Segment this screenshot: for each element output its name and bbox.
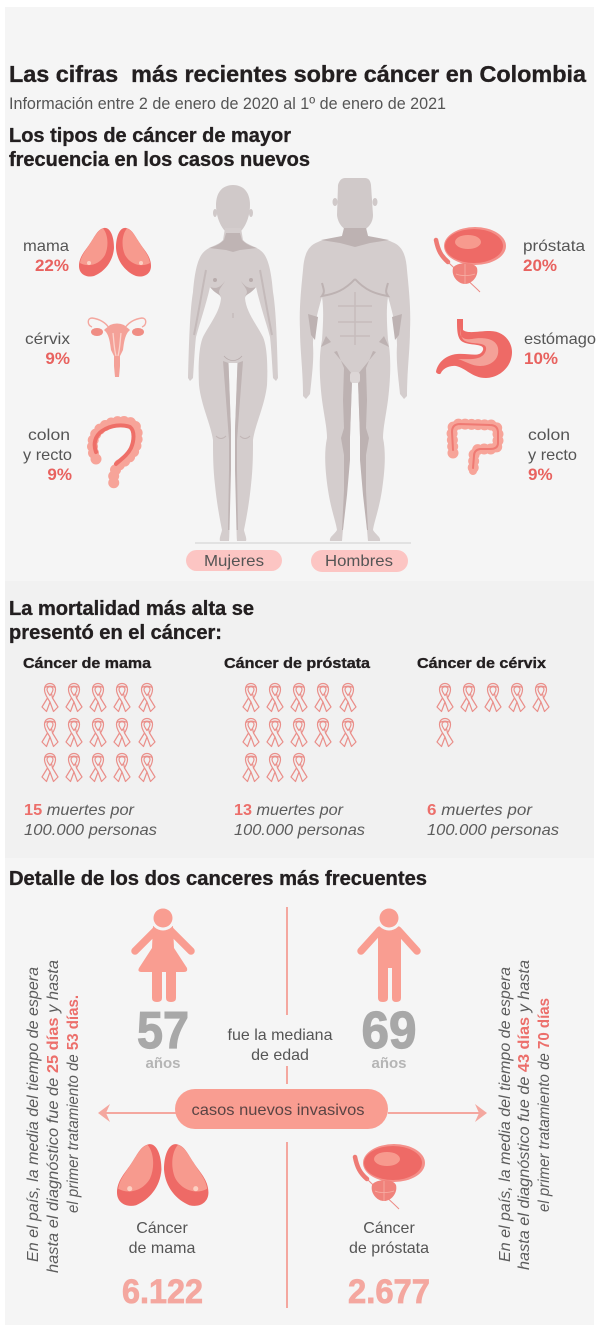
ribbons: 15	[42, 684, 155, 782]
heading: detail: Detalle de los dos canceres más frecuentes	[9, 868, 427, 890]
label: prostate cancer: Cáncer	[363, 1220, 415, 1237]
subtitle: Información entre 2 de enero de 2020 al 1º de enero de 2021	[9, 94, 446, 113]
icon: breasts large	[117, 1144, 208, 1206]
ground line	[195, 542, 411, 544]
label: cervix 9%: 9%	[45, 349, 70, 368]
panel: mortality band	[5, 581, 594, 858]
icon: prostate large	[355, 1144, 425, 1209]
ribbons: 6	[437, 684, 549, 746]
column: cervical cancer mortality	[417, 655, 559, 839]
label: colon y recto 9% (women): 9%	[47, 465, 72, 484]
rotated note: breast wait times: hasta el diagnóstico fue de 25 días y hasta	[45, 960, 62, 1273]
label pill: Hombres	[311, 550, 408, 572]
column: prostate cancer mortality	[224, 655, 371, 839]
icon: colon (women)	[93, 421, 137, 484]
label: prostata 20%: próstata	[523, 238, 585, 255]
column: prostate cancer mortality: 100.000 personas	[234, 822, 365, 839]
icon: man	[361, 906, 417, 1002]
stat: 57 años: 57	[137, 1002, 189, 1060]
rotated note: prostate wait times	[497, 960, 553, 1270]
label: cervix 9%	[25, 331, 70, 368]
rotated note: breast wait times: En el país, la media del tiempo de espera	[25, 967, 42, 1262]
rotated note: prostate wait times: hasta el diagnóstico fue de 43 días y hasta	[516, 960, 533, 1270]
column: cervical cancer mortality: 6 muertes por	[427, 802, 526, 819]
label: colon y recto 9% (women): y recto	[23, 447, 72, 464]
label: colon y recto 9% (men): colon	[528, 427, 570, 444]
label: mama 22%	[23, 238, 69, 275]
stat: 69 años: 69	[362, 1002, 416, 1060]
column: prostate cancer mortality: Cáncer de próstata	[224, 655, 371, 672]
stat: 69 años: años	[371, 1055, 407, 1072]
label: breast cancer: de mama	[129, 1240, 195, 1257]
label: estomago 10%	[524, 331, 596, 368]
icon: woman	[135, 906, 191, 1002]
rotated note: breast wait times	[25, 960, 82, 1273]
heading: mortality: presentó en el cáncer:	[9, 622, 222, 644]
ribbons: 13	[243, 684, 356, 782]
icon: colon (men)	[452, 424, 498, 471]
label: prostata 20%: 20%	[523, 256, 557, 275]
pill: new invasive cases	[175, 1089, 388, 1129]
column: breast cancer mortality: 100.000 personas	[24, 822, 157, 839]
stat: 2.677: 2.677	[348, 1273, 430, 1311]
stat: 57 años: años	[145, 1055, 181, 1072]
rotated note: breast wait times: el primer tratamiento de 53 días.	[65, 995, 82, 1213]
label: cervix 9%: cérvix	[25, 331, 70, 348]
stat: 6.122: 6.122	[122, 1273, 203, 1311]
label: estomago 10%: 10%	[524, 349, 558, 368]
label: prostata 20%	[523, 238, 585, 275]
column: breast cancer mortality	[23, 655, 157, 839]
figure: woman body	[188, 185, 278, 541]
heading: mortality: La mortalidad más alta se	[9, 598, 254, 620]
label: median age: de edad	[251, 1047, 309, 1064]
label pill: Hombres: Hombres	[325, 553, 393, 570]
label: mama 22%: 22%	[35, 256, 69, 275]
figure: man body	[300, 178, 410, 541]
column: breast cancer mortality: 15 muertes por	[24, 802, 132, 819]
label pill: Mujeres: Mujeres	[204, 553, 264, 570]
label: estomago 10%: estómago	[524, 331, 596, 348]
label: colon y recto 9% (men): y recto	[528, 447, 577, 464]
column: prostate cancer mortality: 13 muertes por	[234, 802, 342, 819]
label: breast cancer: Cáncer	[136, 1220, 188, 1237]
label pill: Mujeres	[186, 550, 282, 571]
heading: most frequent types: frecuencia en los casos nuevos	[9, 149, 310, 171]
icon: stomach	[436, 319, 512, 378]
label: median age: fue la mediana	[228, 1027, 333, 1044]
column: cervical cancer mortality: 100.000 personas	[427, 822, 559, 839]
central vertical divider	[286, 907, 288, 1308]
arrow: right	[388, 1104, 487, 1122]
title: Las cifras más recientes sobre cáncer en Colombia	[9, 61, 586, 87]
arrow: left	[98, 1104, 176, 1122]
column: cervical cancer mortality: Cáncer de cérvix	[417, 655, 547, 672]
label: colon y recto 9% (men)	[528, 427, 577, 484]
pill: new invasive cases: casos nuevos invasivos	[192, 1102, 364, 1119]
label: mama 22%: mama	[23, 238, 69, 255]
rotated note: prostate wait times: En el país, la media del tiempo de espera	[497, 967, 514, 1262]
heading: most frequent types: Los tipos de cáncer de mayor	[9, 125, 291, 147]
icon: uterus	[88, 318, 146, 377]
column: breast cancer mortality: Cáncer de mama	[23, 655, 152, 672]
label: colon y recto 9% (women)	[23, 427, 72, 484]
label: colon y recto 9% (men): 9%	[528, 465, 553, 484]
icon: breasts	[79, 228, 151, 277]
rotated note: prostate wait times: el primer tratamiento de 70 días	[536, 998, 553, 1212]
label: prostate cancer: de próstata	[349, 1240, 429, 1257]
icon: prostate	[436, 227, 506, 292]
label: colon y recto 9% (women): colon	[28, 427, 70, 444]
